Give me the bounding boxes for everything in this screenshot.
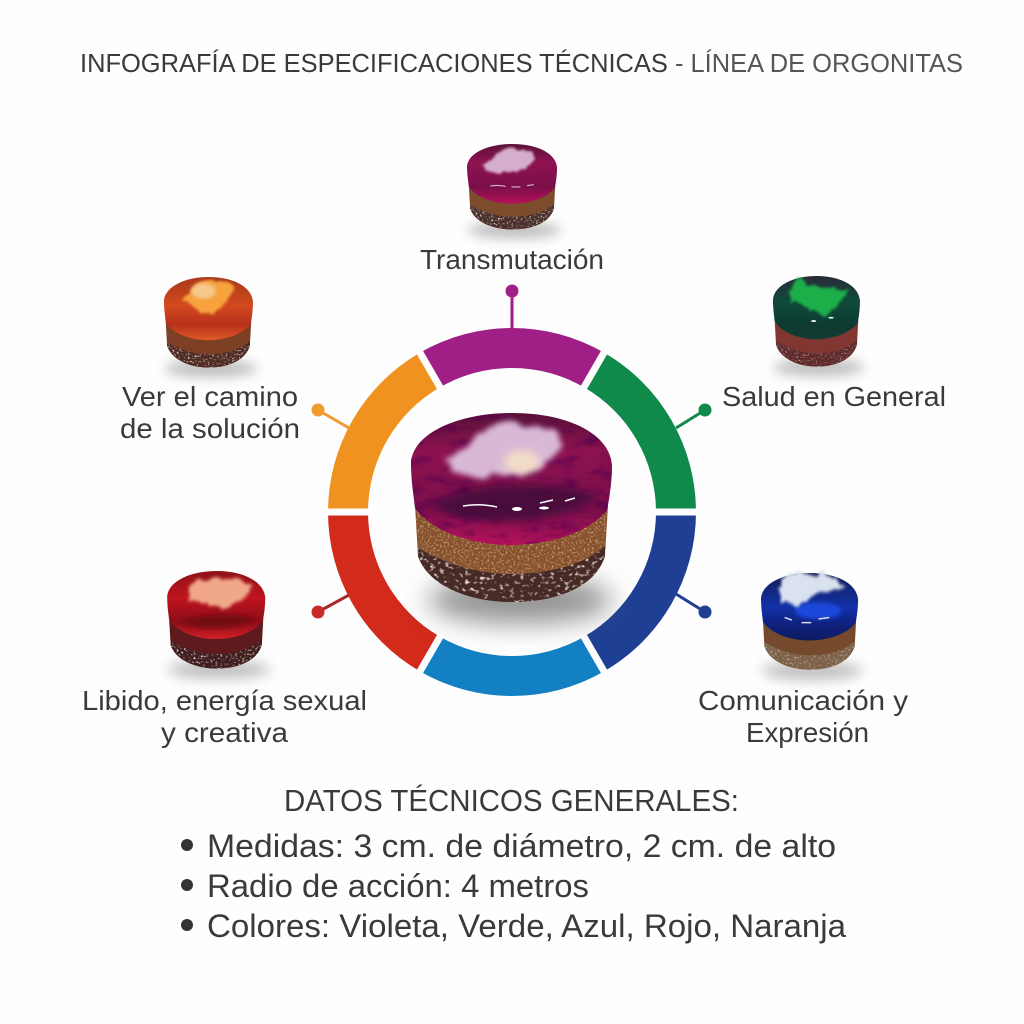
- ring segment: light blue: [420, 637, 604, 696]
- connector pin: blue: [676, 594, 712, 618]
- small blue orgonite: [761, 573, 863, 680]
- bullet: measures: Medidas: 3 cm. de diámetro, 2 cm. de alto: [207, 828, 836, 864]
- ring segment: green: [584, 353, 696, 512]
- central violet orgonite: [411, 413, 612, 624]
- connector pin: orange: [312, 404, 349, 428]
- label: Ver el camino de la solución: Ver el camino: [122, 381, 298, 412]
- label: Transmutación: Transmutación: [420, 244, 604, 275]
- small red orgonite: [167, 571, 270, 679]
- small green orgonite: [773, 276, 864, 376]
- bullet: colours: Colores: Violeta, Verde, Azul, Rojo, Naranja: [207, 908, 846, 944]
- connector pin: green: [676, 404, 712, 428]
- connector pin: red: [312, 595, 349, 618]
- label: Comunicación y Expresión: [698, 685, 908, 748]
- label: Comunicación y Expresión: Expresión: [746, 717, 869, 748]
- small orange orgonite: [164, 277, 257, 377]
- circular diagram ring: [320, 328, 704, 696]
- ring segment: red: [328, 512, 440, 671]
- label: Ver el camino de la solución: de la solución: [120, 413, 300, 444]
- ring segment: violet: [420, 328, 604, 387]
- heading: general technical data: DATOS TÉCNICOS GENERALES:: [284, 783, 739, 818]
- ring segment: dark blue: [584, 512, 696, 671]
- technical data list: [181, 828, 846, 944]
- label: Libido, energía sexual y creativa: [82, 685, 367, 748]
- label: Libido, energía sexual y creativa: Libido, energía sexual: [82, 685, 367, 716]
- bullet: action radius: Radio de acción: 4 metros: [207, 868, 589, 904]
- label: Ver el camino de la solución: [120, 381, 300, 444]
- label: Salud en General: Salud en General: [722, 381, 946, 412]
- ring segment: orange: [328, 353, 440, 512]
- connector pin: violet: [506, 284, 518, 328]
- small violet orgonite: [467, 144, 562, 238]
- title: INFOGRAFÍA DE ESPECIFICACIONES TÉCNICAS - LÍNEA DE ORGONITAS: [80, 48, 963, 78]
- label: Comunicación y Expresión: Comunicación y: [698, 685, 908, 716]
- label: Libido, energía sexual y creativa: y creativa: [161, 717, 288, 748]
